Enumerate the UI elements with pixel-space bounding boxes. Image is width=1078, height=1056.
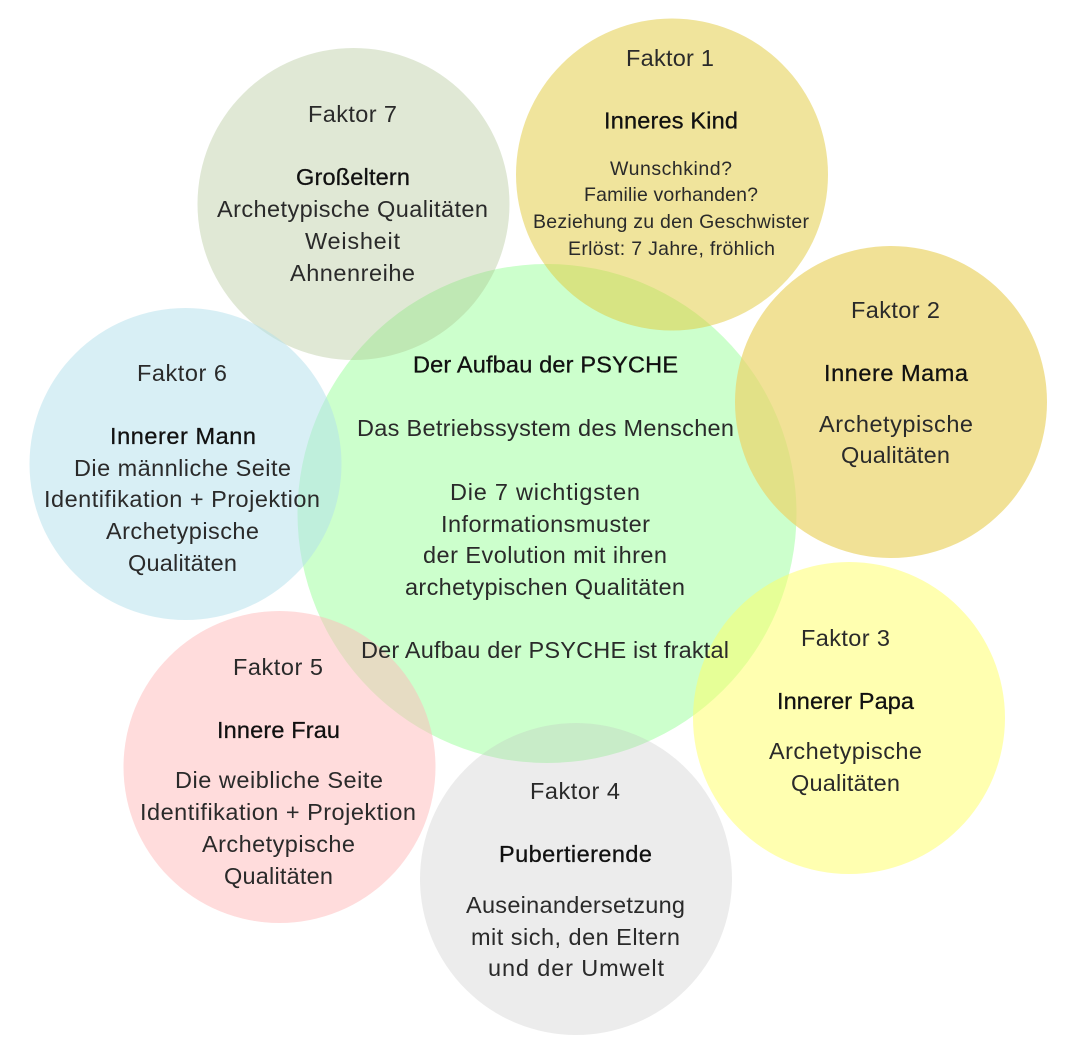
text: Faktor 3: Faktor 3	[801, 625, 890, 651]
text: Faktor 7: Großeltern	[296, 164, 410, 190]
text: Faktor 6: Identifikation + Projektion	[44, 486, 320, 512]
text: Faktor 4: mit sich, den Eltern	[471, 924, 680, 950]
text: Faktor 2: Archetypische	[819, 411, 973, 437]
text: Faktor 3: Archetypische	[769, 738, 922, 764]
text: central Psyche	[357, 352, 734, 663]
circle: Faktor 5	[124, 611, 436, 923]
text: Faktor 5: Archetypische	[202, 831, 355, 857]
text: Faktor 7: Faktor 7	[308, 101, 397, 127]
text: Faktor 1: Inneres Kind	[604, 108, 738, 134]
text: Faktor 3	[769, 625, 922, 796]
text: Faktor 4: und der Umwelt	[488, 955, 664, 981]
text: Faktor 4: Auseinandersetzung	[466, 892, 685, 918]
circle: Faktor 4	[420, 723, 732, 1035]
text: Faktor 6: Qualitäten	[128, 550, 237, 576]
text: central Psyche: archetypischen Qualitäten	[405, 574, 685, 600]
text: Faktor 7: Ahnenreihe	[290, 260, 415, 286]
text: central Psyche: Informationsmuster	[441, 511, 650, 537]
text: Faktor 7: Archetypische Qualitäten	[217, 196, 488, 222]
circle: Faktor 6	[30, 308, 342, 620]
circle: Faktor 1	[516, 18, 828, 330]
text: Faktor 6: Faktor 6	[137, 360, 227, 386]
text: Faktor 5: Faktor 5	[233, 654, 323, 680]
text: Faktor 7: Weisheit	[305, 228, 400, 254]
text: central Psyche: Der Aufbau der PSYCHE	[413, 352, 678, 378]
text: Faktor 2: Qualitäten	[841, 442, 950, 468]
text: Faktor 3: Innerer Papa	[777, 688, 915, 714]
text: central Psyche: Der Aufbau der PSYCHE ist fraktal	[361, 637, 729, 663]
text: Faktor 4	[466, 778, 685, 981]
circle: Faktor 2	[735, 246, 1047, 558]
text: central Psyche: der Evolution mit ihren	[423, 542, 667, 568]
text: Faktor 5: Innere Frau	[217, 717, 340, 743]
text: Faktor 5: Die weibliche Seite	[175, 767, 383, 793]
text: Faktor 7	[217, 101, 488, 286]
text: Faktor 4: Pubertierende	[499, 841, 652, 867]
text: Faktor 5: Identifikation + Projektion	[140, 799, 416, 825]
text: Faktor 3: Qualitäten	[791, 770, 900, 796]
text: central Psyche: Das Betriebssystem des Menschen	[357, 415, 734, 441]
circle: central Psyche	[298, 264, 796, 763]
text: central Psyche: Die 7 wichtigsten	[450, 479, 640, 505]
text: Faktor 1: Erlöst: 7 Jahre, fröhlich	[568, 238, 775, 260]
text: Faktor 5	[140, 654, 416, 889]
text: Faktor 2: Faktor 2	[851, 297, 940, 323]
text: Faktor 6: Archetypische	[106, 518, 259, 544]
text: Faktor 5: Qualitäten	[224, 863, 333, 889]
text: Faktor 2: Innere Mama	[824, 360, 969, 386]
text: Faktor 1: Wunschkind?	[610, 158, 732, 180]
text: Faktor 1: Beziehung zu den Geschwister	[533, 211, 810, 233]
text: Faktor 1: Faktor 1	[626, 45, 714, 71]
circle: Faktor 7	[198, 48, 510, 360]
text: Faktor 6: Innerer Mann	[110, 423, 256, 449]
text: Faktor 4: Faktor 4	[530, 778, 620, 804]
text: Faktor 6: Die männliche Seite	[74, 455, 291, 481]
text: Faktor 6	[44, 360, 320, 576]
text: Faktor 1: Familie vorhanden?	[584, 184, 758, 206]
circle: Faktor 3	[693, 562, 1005, 874]
text: Faktor 1	[533, 45, 810, 260]
text: Faktor 2	[819, 297, 973, 468]
